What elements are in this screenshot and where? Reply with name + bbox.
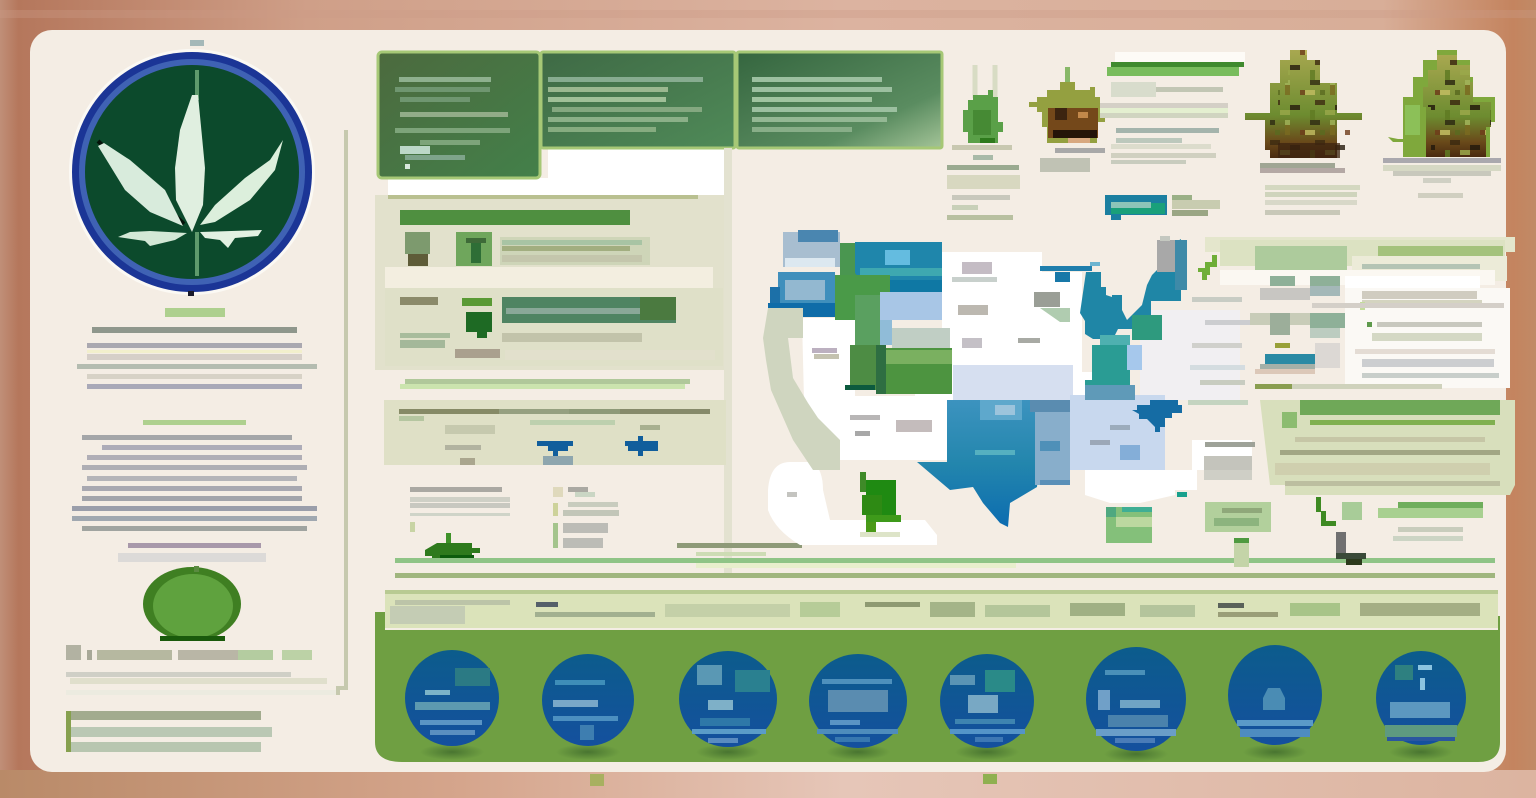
icon: blue marker [537,441,573,465]
state: Mid Atlantic [1127,345,1142,370]
green rule strip [400,379,690,389]
state: South Carolina dark blue [1132,400,1182,432]
strain images row [947,50,1501,220]
left column border [66,130,346,693]
badge 6 [1086,647,1186,751]
panel: bottom green band [375,590,1500,762]
badge 7 [1228,645,1322,745]
green bud icon [143,566,241,641]
panel: comparison table [384,400,726,465]
oval shadows [420,744,1453,762]
horizontal rules [395,543,1495,578]
top dark green text boxes [378,52,942,195]
text block: lower list right [553,487,619,548]
state: Eastern teal band [1080,239,1181,400]
top leaflet [175,95,205,232]
icon: dark green plant [462,298,492,338]
state: central green band [835,243,952,394]
bottom edge tabs [590,774,997,786]
text block: strain details [1100,52,1245,164]
icon: desk lamp and label [1316,497,1483,565]
pale east coast wash [1140,310,1240,400]
icon: green note card [1205,502,1271,567]
state: Plains grey blue [1030,400,1070,485]
lower left text [66,645,336,752]
strain: seedling [947,65,1020,220]
icon: green tile [1106,507,1152,543]
state labels [787,262,1070,497]
icon: green leaf [1198,255,1217,280]
state: Pacific Northwest [768,230,840,317]
lower right leaflet [200,230,262,248]
upper left leaflet [98,143,183,226]
icon: small green plant [425,533,480,563]
text bars beside map [1188,297,1255,480]
left column panel [66,40,346,752]
panel: product row two [385,288,723,366]
state: Montana teal [855,242,942,292]
panel: right info card [1205,237,1515,389]
icon: green tile [456,232,492,266]
state: central light band [953,365,1073,400]
white gulf band [838,397,948,460]
state: Southeast light blue [1070,395,1165,470]
benefit labels strip [385,590,1498,628]
state: Maine grey [1157,236,1187,290]
state: Great Lakes [1040,262,1100,282]
center-left panels [375,195,726,563]
box 3 [737,52,942,148]
strain: large bud one [1245,50,1362,215]
box 1 [378,52,540,178]
icon: figure [405,232,430,266]
state: Texas [917,400,1039,527]
text block: lower list left [410,487,510,532]
green band background [375,612,1500,762]
US map [763,230,1252,545]
lower left leaflet [118,231,187,246]
divider column [724,148,732,573]
state: Idaho light blue [880,292,950,348]
badge 4 [809,654,907,748]
leaf stem [195,70,199,276]
badge 2 [542,654,634,746]
intro heading and paragraph [77,308,317,389]
white map ground [802,252,1252,490]
box 2 [541,52,735,148]
state: California [763,308,840,470]
upper right leaflet [200,140,283,225]
badge 5 [940,654,1034,748]
badge 8 [1376,651,1466,745]
icon tiles [1250,276,1345,374]
circular cannabis logo [69,40,315,296]
icon: green plant lower [860,472,901,537]
icon: blue marker [625,436,658,456]
panel: product row one [375,195,724,370]
white lower left blob [768,462,937,545]
badge 1 [405,650,499,746]
white lower right blob [1085,470,1190,503]
badge 3 [679,651,777,747]
upper leaflet shadow [98,141,184,224]
strain: small bud [1029,67,1105,172]
teal tag with label [1105,195,1220,220]
strain: large bud two [1383,50,1501,198]
panel: cream strip [385,267,713,291]
section paragraph [72,420,317,562]
panel: right green callout [1260,400,1515,495]
